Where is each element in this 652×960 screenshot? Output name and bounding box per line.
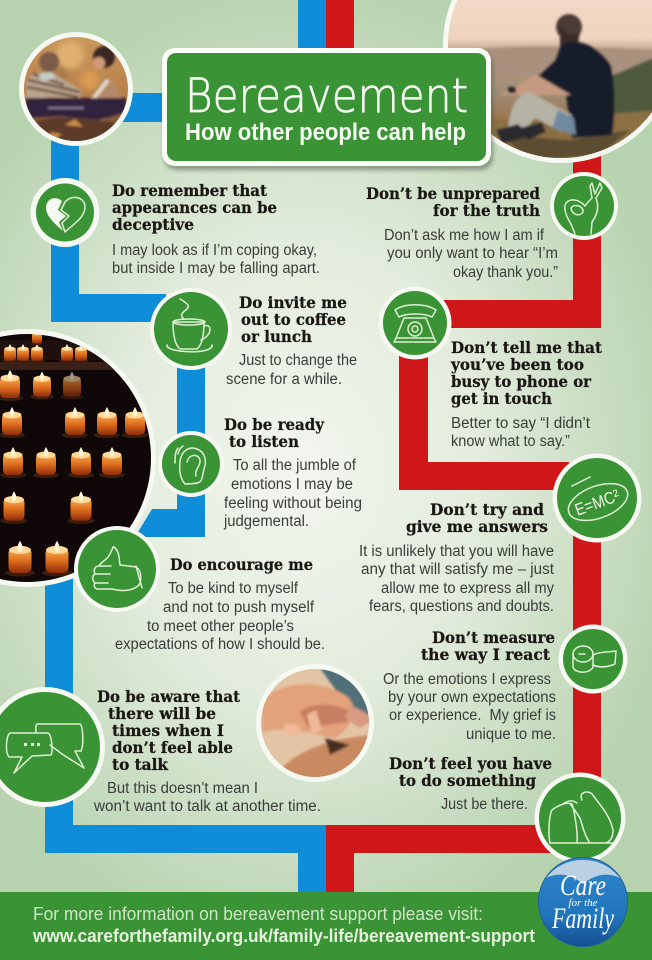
icon: ear [158,431,224,497]
icon: speech bubbles [0,687,105,807]
text block: Do remember [112,181,320,277]
text block: Don't tell me: Don’t tell me that [451,338,603,357]
text block: Don't try: Don’t try and [430,500,544,519]
text block: Don't feel you have: Just be there. [441,796,528,813]
text block: Don't measure: Don’t measure [432,628,555,647]
text block: Do remember: but inside I may be falling apart. [112,260,320,277]
text block: Don't tell me: know what to say.” [451,433,570,450]
text block: Don't measure [383,628,556,743]
text block: Don't be unprepared: Don’t ask me how I am if [384,227,545,244]
icon: tape measure [558,624,628,694]
icon: OK hand sign [550,172,618,240]
text block: Do be aware: to talk [112,755,168,774]
text block: Don't feel you have [389,754,552,813]
text block: Don't measure: unique to me. [466,726,556,743]
text block: Don't be unprepared: for the truth [433,201,540,220]
text block: Do invite me [226,293,357,388]
text block: Do encourage me: Do encourage me [170,555,313,574]
text block: Don't feel you have: to do something [399,771,536,790]
text block: Don't try: give me answers [406,517,548,536]
text block: Do invite me: or lunch [241,327,312,346]
logo: Care for the Family: Care [560,869,606,902]
text block: Don't try: allow me to express all my [381,580,554,597]
text block: Don't tell me: you’ve been too [450,355,584,374]
text block: Don't measure: the way I react [421,645,551,664]
text block: Do encourage me: and not to push myself [163,599,315,616]
text block: Don't try [359,500,555,615]
logo: Care for the Family: Family [551,902,614,935]
text block: Don't tell me: get in touch [451,389,552,408]
text block: Do be aware [93,687,321,815]
text block: Do be ready: feeling without being [224,495,362,512]
red route line (Don'ts) [326,0,601,895]
text block: Don't be unprepared [366,184,558,281]
text block: Do be ready: To all the jumble of [233,457,357,474]
icon: thumbs up [74,526,160,612]
text block: Don't tell me: busy to phone or [451,372,592,391]
blue route line (Do's) [45,0,326,895]
footer link: www.careforthefamily.org.uk/family-life/bereavement-support [32,926,535,946]
text block: Do remember: appearances can be [112,198,277,217]
footer band [0,892,652,960]
text block: Do be ready: to listen [229,432,299,451]
text block: Do remember: Do remember that [112,181,268,200]
text block: Don't try: It is unlikely that you will have [359,543,554,560]
text block: Do be aware: times when I [112,721,224,740]
title panel [162,48,493,170]
text block: Don't tell me: Better to say “I didn’t [451,415,591,432]
text block: Don't be unprepared: okay thank you.” [453,264,558,281]
text block: Do invite me: Do invite me [239,293,347,312]
text block: Do be aware: don’t feel able [112,738,233,757]
text block: Do encourage me: to meet other people’s [147,618,294,635]
text block: Do remember: I may look as if I’m coping okay, [112,242,317,259]
text block: Don't feel you have: Don’t feel you have [389,754,552,773]
text block: Do be aware: won’t want to talk at another time. [93,798,321,815]
text block: Do encourage me: expectations of how I should be. [115,636,325,653]
photo: man sitting on a hillside [440,0,652,165]
subtitle: How other people can help [185,119,466,146]
text block: Do be aware: But this doesn’t mean I [107,780,258,797]
text block: Do remember: deceptive [112,215,194,234]
text block: Do invite me: Just to change the [239,352,357,369]
text block: Don't measure: by your own expectations [388,689,556,706]
photo: holding hands [256,664,374,782]
photo: older couple on bench [19,32,133,146]
text block: Do be aware: there will be [108,704,216,723]
text block: Don't measure: Or the emotions I express [383,671,551,688]
text block: Don't be unprepared: Don’t be unprepared [366,184,540,203]
text block: Don't try: any that will satisfy me – just [361,561,555,578]
text block: Do be ready: judgemental. [223,513,309,530]
text block: Do be ready: emotions I may be [231,476,353,493]
icon: E=MC2 on blackboard: E=MC² [572,486,622,520]
text block: Do be ready: Do be ready [224,415,325,434]
text block: Don't be unprepared: you only want to hear “I’m [387,245,558,262]
text block: Do invite me: out to coffee [241,310,346,329]
text block: Don't tell me [450,338,603,450]
icon: coffee cup [150,288,232,370]
icon: rotary telephone [378,286,452,360]
text block: Do be aware: Do be aware that [97,687,241,706]
text block: Don't try: fears, questions and doubts. [369,598,554,615]
footer text: more information: For more information on bereavement support please visit: [33,904,483,924]
icon: two people embracing [534,772,626,864]
title heading: Bereavement [185,69,468,124]
logo: Care for the Family: for the [568,897,598,909]
text block: Do encourage me: To be kind to myself [168,580,299,597]
text block: Do invite me: scene for a while. [226,371,342,388]
icon: E=MC2 on blackboard [552,454,642,542]
text block: Do encourage me [115,555,325,653]
text block: Do be ready [223,415,362,530]
logo: Care for the Family [538,858,628,946]
icon: broken heart [30,178,100,247]
photo: church candles [0,329,160,590]
text block: Don't measure: or experience. My grief is [389,707,556,724]
